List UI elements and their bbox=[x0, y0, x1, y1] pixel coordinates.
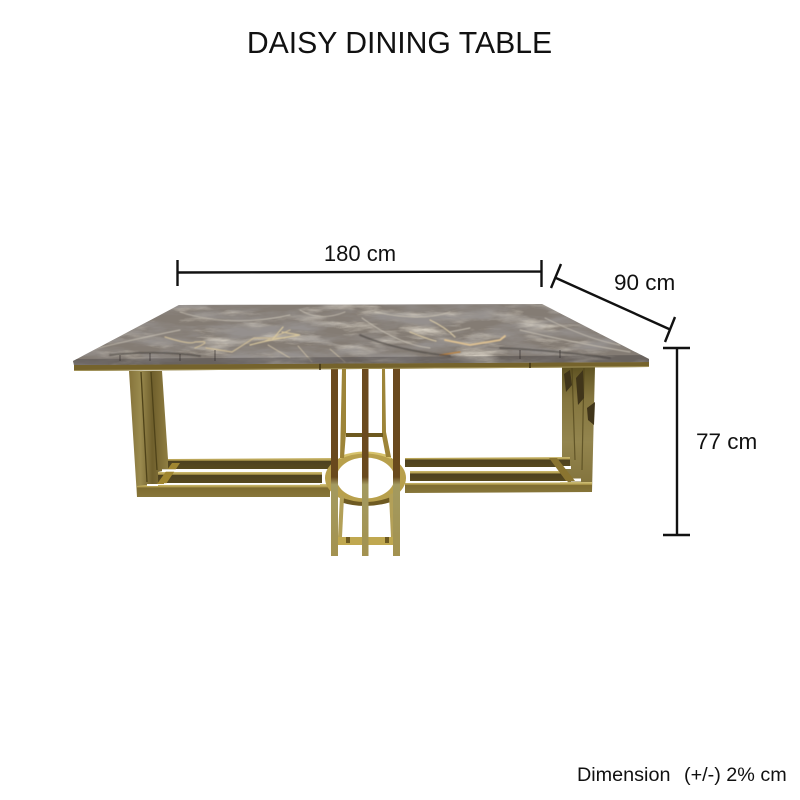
title: DAISY DINING TABLE bbox=[247, 27, 552, 60]
footnote: dimension tolerance: Dimension bbox=[577, 764, 670, 786]
left leg frame bbox=[129, 371, 332, 497]
dimension: height 77 cm bbox=[663, 348, 757, 535]
centre gold ring bbox=[325, 452, 406, 506]
marble table top bbox=[73, 304, 649, 365]
centre thin rear legs and crossbars bbox=[338, 369, 394, 545]
footnote: dimension tolerance: (+/-) 2% cm bbox=[684, 764, 787, 786]
dimension: depth 90 cm: 90 cm bbox=[614, 270, 675, 295]
right leg frame bbox=[405, 367, 595, 493]
table illustration bbox=[70, 300, 655, 556]
brass apron under top bbox=[74, 360, 649, 371]
marble veins bbox=[90, 310, 630, 362]
dimension: width 180 cm: 180 cm bbox=[324, 241, 396, 266]
centre front legs bbox=[331, 368, 400, 556]
dimension: depth 90 cm bbox=[551, 264, 675, 342]
dimension: width 180 cm bbox=[177, 241, 542, 287]
dimension: height 77 cm: 77 cm bbox=[696, 429, 757, 454]
marble front edge bbox=[73, 350, 650, 365]
